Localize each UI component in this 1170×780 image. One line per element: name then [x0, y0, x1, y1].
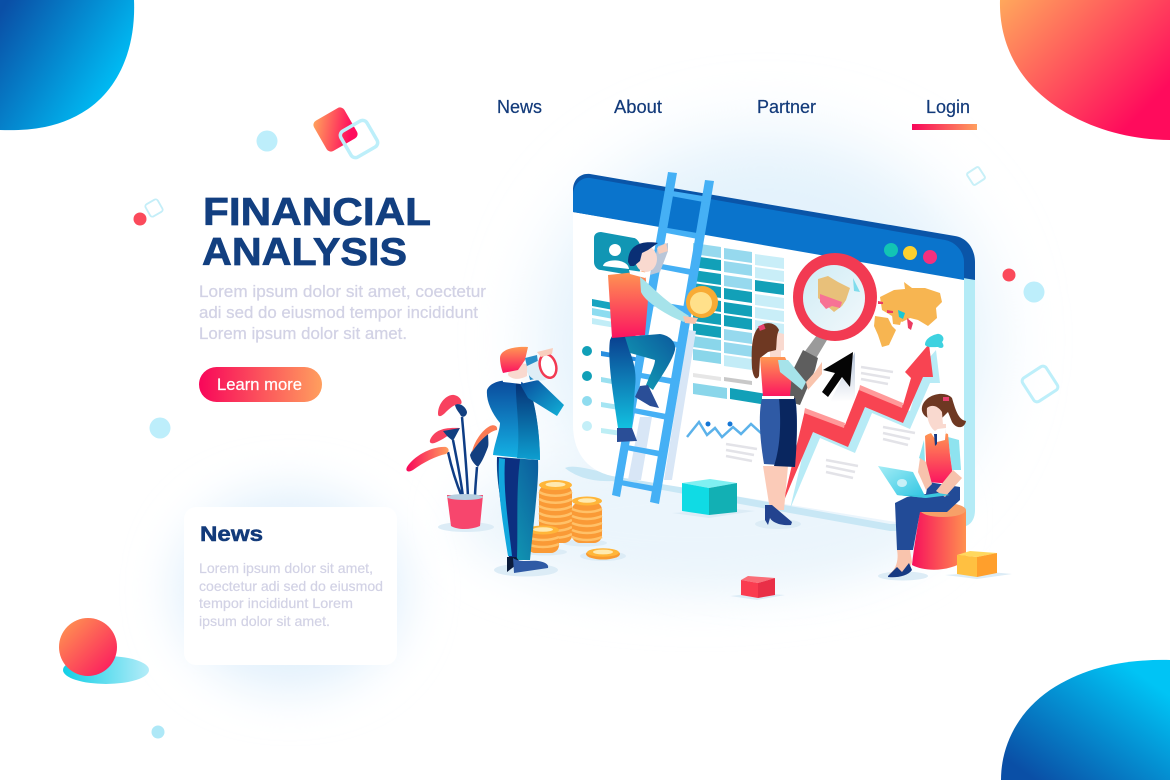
decorative shapes: right side [966, 166, 1059, 403]
navigation: News [497, 97, 542, 117]
blob: bottom right [1001, 660, 1170, 780]
decorative ball with shadow [59, 618, 149, 684]
ladder [612, 172, 714, 504]
world map [874, 282, 942, 347]
panel: news: Lorem ipsum dolor sit amet, [199, 560, 373, 576]
ladder shadow [628, 330, 696, 480]
line chart [687, 367, 915, 478]
woman with magnifier [752, 323, 822, 529]
coins [523, 480, 626, 561]
illustration glow [540, 135, 990, 545]
navigation: Login [926, 97, 970, 117]
learn more button [199, 367, 322, 402]
navigation: About [614, 97, 662, 117]
growth arrow [783, 334, 943, 509]
woman on stool with laptop [878, 394, 966, 580]
red box [730, 576, 785, 600]
floor glow [460, 445, 940, 595]
left list rows [582, 299, 640, 436]
panel: news [184, 507, 397, 665]
title: FINANCIAL [203, 191, 431, 234]
gold coin held [686, 286, 718, 318]
browser window [565, 174, 975, 531]
panel: news: coectetur adi sed do eiusmod [199, 578, 383, 594]
data table [693, 243, 784, 405]
intro paragraph: adi sed do eiusmod tempor incididunt [199, 304, 478, 322]
title: ANALYSIS [202, 231, 407, 274]
title [202, 191, 431, 274]
cursor arrow [822, 352, 855, 402]
intro paragraph: Lorem ipsum dolor sit amet, coectetur [199, 283, 487, 301]
panel: news: ipsum dolor sit amet. [199, 613, 330, 629]
teal box [672, 479, 755, 518]
navigation [497, 97, 977, 130]
intro paragraph: Lorem ipsum dolor sit amet. [199, 325, 407, 343]
navigation: Partner [757, 97, 816, 117]
blob: top right [1000, 0, 1170, 140]
magnifying glass [789, 253, 877, 405]
news panel glow [175, 490, 405, 690]
learn more button: Learn more [217, 376, 302, 394]
man climbing ladder [608, 242, 698, 442]
decorative shapes: top left cluster [134, 106, 379, 739]
plant [406, 395, 497, 532]
panel: news: tempor incididunt Lorem [199, 595, 353, 611]
user avatar icon [594, 232, 640, 275]
intro paragraph [199, 283, 487, 343]
blob: top left [0, 0, 134, 130]
man with megaphone [487, 347, 564, 576]
yellow box [945, 551, 1012, 579]
panel: news: News [200, 523, 263, 546]
